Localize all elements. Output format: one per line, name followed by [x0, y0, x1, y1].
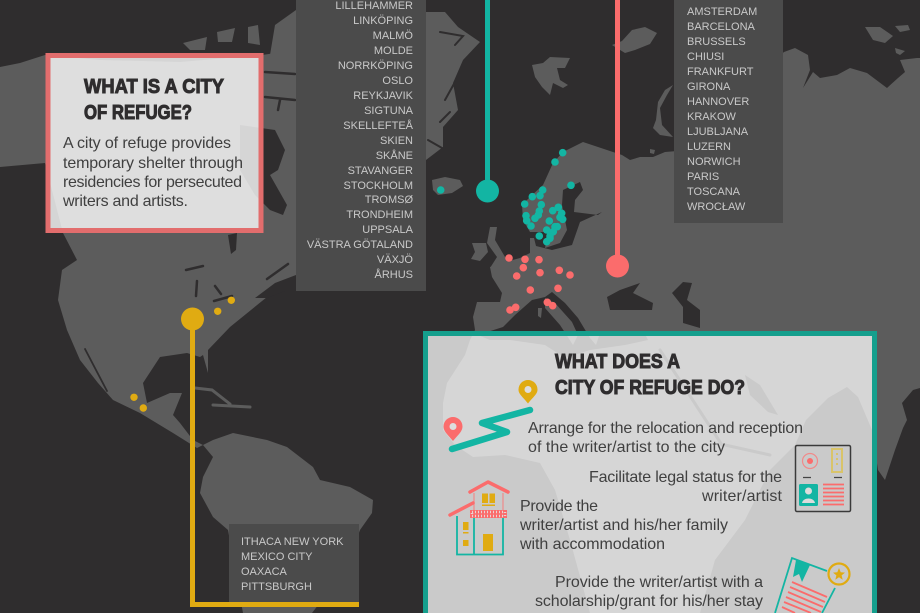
text block: relocation [528, 420, 803, 456]
panel: Nordic cities list: TROMSØ [365, 194, 413, 206]
text block: accommodation: with accommodation [519, 536, 665, 553]
panel: Nordic cities list: SKÅNE [376, 149, 413, 162]
heading: what is a city of refuge: WHAT IS A CITY [84, 76, 225, 98]
panel: Nordic cities list: TRONDHEIM [346, 209, 413, 221]
heading: what does a city of refuge do: WHAT DOES A [555, 351, 680, 373]
panel: Americas cities list: MEXICO CITY [241, 551, 313, 563]
teal pointer line and marker [476, 0, 499, 202]
panel: Nordic cities list: STAVANGER [348, 165, 413, 177]
panel: Americas cities list: ITHACA NEW YORK [241, 536, 344, 548]
panel: Nordic cities list: SKELLEFTEÅ [343, 119, 414, 132]
panel: European cities list: HANNOVER [687, 96, 749, 108]
panel: Nordic cities list: UPPSALA [362, 224, 414, 236]
panel: Nordic cities list: STOCKHOLM [344, 180, 413, 192]
panel: Americas cities list [229, 524, 359, 602]
text block: definition: writers and artists. [62, 193, 188, 210]
panel: European cities list: LJUBLJANA [687, 126, 749, 138]
panel: European cities list: FRANKFURT [687, 66, 754, 78]
text block: definition: residencies for persecuted [63, 174, 242, 191]
panel: Nordic cities list: VÄSTRA GÖTALAND [307, 239, 413, 251]
panel: Nordic cities list: LILLEHAMMER [335, 0, 413, 12]
panel: European cities list: BARCELONA [687, 21, 756, 33]
heading: what is a city of refuge: OF REFUGE? [84, 102, 192, 124]
heading: what is a city of refuge [84, 76, 225, 124]
text block: definition: A city of refuge provides [63, 135, 231, 152]
text block: legal status: writer/artist [701, 488, 783, 505]
panel: Nordic cities list: SIGTUNA [364, 105, 414, 117]
panel: Nordic cities list: OSLO [382, 75, 413, 87]
panel: European cities list: KRAKOW [687, 111, 737, 123]
panel: Nordic cities list: REYKJAVIK [353, 90, 414, 102]
panel: European cities list: CHIUSI [687, 51, 724, 63]
text block: legal status: Facilitate legal status for the [589, 469, 782, 486]
heading: what does a city of refuge do [555, 351, 745, 399]
text block: definition: temporary shelter through [63, 155, 243, 172]
text block: legal status [589, 469, 783, 505]
text block: scholarship: Provide the writer/artist with a [555, 574, 763, 591]
heading: what does a city of refuge do: CITY OF REFUGE DO? [555, 377, 745, 399]
coral city dots: continental Europe [505, 254, 574, 314]
text block: accommodation: writer/artist and his/her family [519, 517, 728, 534]
panel: what is a city of refuge [48, 56, 261, 230]
panel: European cities list: WROCŁAW [687, 201, 746, 213]
coral pointer line and marker [606, 0, 629, 278]
icon: scholarship certificate with seal [775, 558, 850, 613]
panel: what does a city of refuge do [426, 334, 874, 613]
panel: Nordic cities list: SKIEN [380, 135, 413, 147]
panel: Nordic cities list: VÄXJÖ [377, 254, 413, 266]
panel: Nordic cities list: ÅRHUS [374, 268, 413, 281]
panel: European cities list: GIRONA [687, 81, 731, 93]
text block: scholarship: scholarship/grant for his/her stay [535, 593, 763, 610]
panel: Nordic cities list: MOLDE [374, 45, 413, 57]
panel: European cities list: LUZERN [687, 141, 731, 153]
panel: Nordic cities list: NORRKÖPING [338, 60, 413, 72]
panel: Americas cities list: OAXACA [241, 566, 288, 578]
yellow pointer line, marker and city dots [130, 297, 359, 607]
panel: European cities list: BRUSSELS [687, 36, 746, 48]
panel: European cities list: PARIS [687, 171, 719, 183]
panel: Nordic cities list: MALMÖ [373, 30, 413, 42]
text block: accommodation [519, 498, 728, 553]
panel: European cities list: TOSCANA [687, 186, 741, 198]
text block: relocation: Arrange for the relocation and reception [528, 420, 803, 437]
text block: relocation: of the writer/artist to the city [528, 439, 725, 456]
icon: legal document [796, 446, 850, 512]
icon: route with location pins [444, 380, 538, 449]
panel: Americas cities list: PITTSBURGH [241, 581, 312, 593]
teal city dots: Nordic region [437, 149, 575, 246]
text block: accommodation: Provide the [520, 498, 598, 515]
panel: European cities list: NORWICH [687, 156, 741, 168]
panel: European cities list [674, 0, 783, 223]
panel: European cities list: AMSTERDAM [687, 6, 757, 18]
panel: Nordic cities list [296, 0, 426, 291]
panel: Nordic cities list: LINKÖPING [353, 15, 413, 27]
icon: house [450, 482, 508, 554]
text block: definition [62, 135, 243, 210]
text block: scholarship [535, 574, 763, 610]
